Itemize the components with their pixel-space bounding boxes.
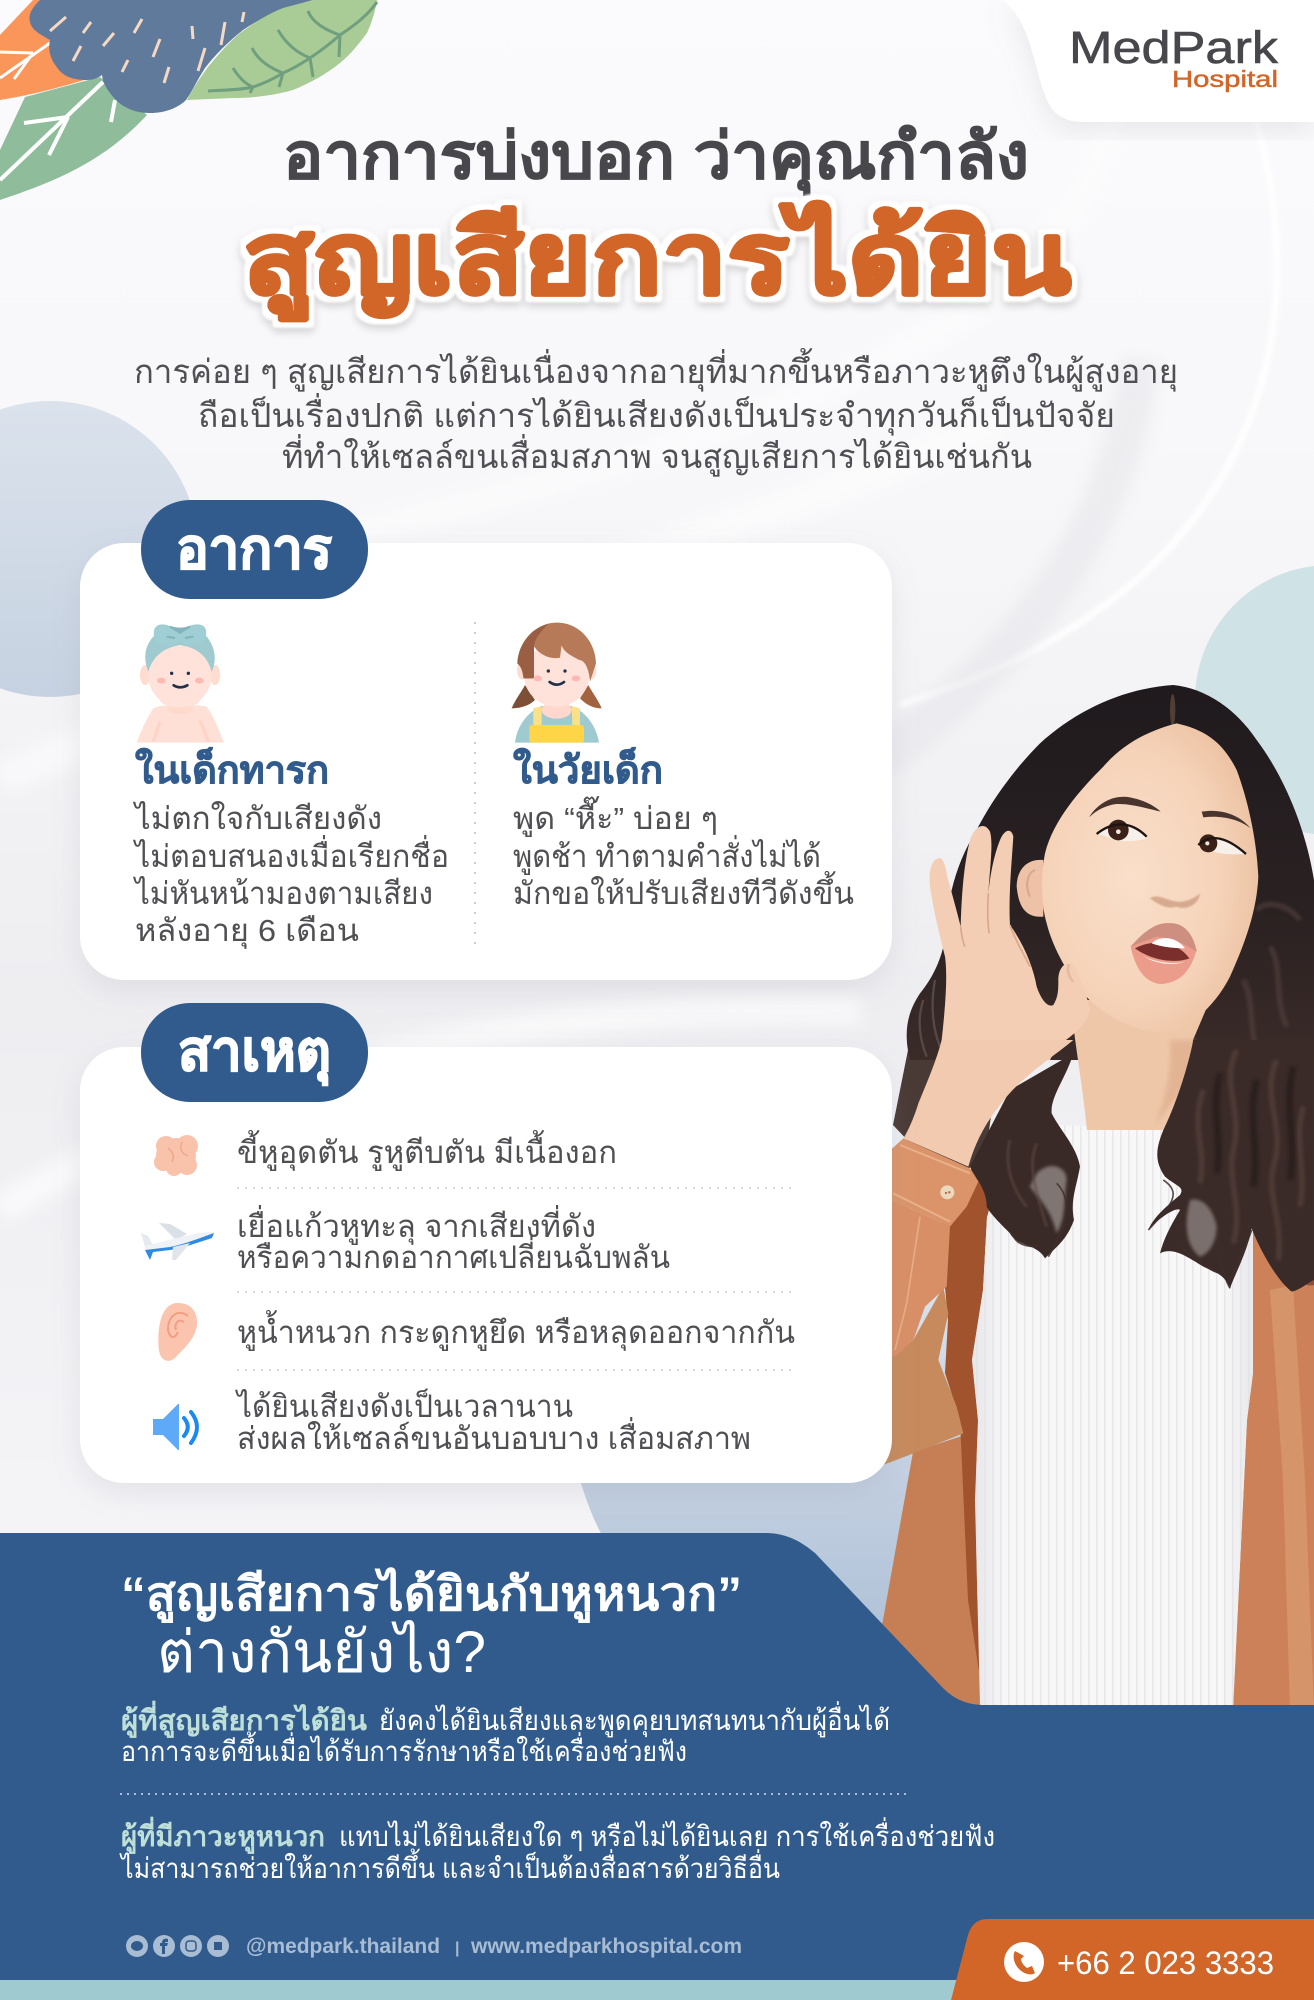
jacket cuff bbox=[870, 1138, 978, 1227]
causes heading pill: สาเหตุ bbox=[178, 1019, 331, 1086]
cause 2 bbox=[237, 1205, 670, 1275]
panel heading: “สูญเสียการได้ยินกับหูหนวก” bbox=[121, 1566, 742, 1624]
footer handle and website: | bbox=[455, 1940, 459, 1957]
icon: earwax bbox=[154, 1135, 198, 1176]
cause 1: ขี้หูอุดตัน รูหูตีบตัน มีเนื้องอก bbox=[237, 1130, 617, 1172]
hair wisps bbox=[1013, 1180, 1252, 1288]
logo sub-label: Hospital bbox=[1172, 66, 1278, 92]
decorative circle left bbox=[0, 401, 198, 697]
jacket lower front bbox=[860, 1435, 985, 1710]
hair behind wrist bbox=[893, 1050, 1000, 1180]
nose bbox=[1150, 893, 1200, 908]
mouth bbox=[1131, 923, 1197, 984]
cause 2: เยื่อแก้วหูทะลุ จากเสียงที่ดัง bbox=[237, 1205, 596, 1246]
baby symptoms list: หลังอายุ 6 เดือน bbox=[135, 913, 359, 950]
text: hearing loss: อาการจะดีขึ้นเมื่อได้รับการรักษาหรือใช้เครื่องช่วยฟัง bbox=[121, 1731, 687, 1767]
hair upper bbox=[907, 685, 1314, 1060]
child symptoms list: พูด “หื๊ะ” บ่อย ๆ bbox=[513, 796, 718, 837]
cause 2: หรือความกดอากาศเปลี่ยนฉับพลัน bbox=[237, 1236, 670, 1275]
title line 1: อาการบ่งบอก ว่าคุณกำลัง bbox=[283, 120, 1029, 196]
causes heading pill bbox=[141, 1003, 368, 1102]
jacket dark inner bbox=[940, 1165, 1000, 1710]
baby symptoms list: ไม่ตกใจกับเสียงดัง bbox=[132, 801, 382, 836]
text: deafness bbox=[119, 1816, 995, 1884]
panel: causes bbox=[80, 1003, 892, 1483]
icon: airplane bbox=[141, 1223, 214, 1260]
footer handle and website bbox=[246, 1935, 742, 1958]
text: deafness: ผู้ที่มีภาวะหูหนวก bbox=[121, 1816, 325, 1854]
intro paragraph: การค่อย ๆ สูญเสียการได้ยินเนื่องจากอายุที่มากขึ้นหรือภาวะหูตึงในผู้สูงอายุ bbox=[134, 348, 1178, 392]
ear bbox=[1017, 860, 1043, 917]
icon: speaker bbox=[153, 1404, 197, 1450]
decorative circle bottom bbox=[569, 1105, 1159, 1695]
cause 3: หูน้ำหนวก กระดูกหูยึด หรือหลุดออกจากกัน bbox=[237, 1310, 795, 1352]
cause 4: ได้ยินเสียงดังเป็นเวลานาน bbox=[234, 1388, 573, 1424]
title line 2: สูญเสียการได้ยิน bbox=[243, 202, 1071, 321]
child symptoms list: พูดช้า ทำตามคำสั่งไม่ได้ bbox=[513, 835, 821, 875]
jacket right side bbox=[1233, 1230, 1314, 1710]
child symptoms list bbox=[513, 796, 854, 911]
baby symptoms list: ไม่หันหน้ามองตามเสียง bbox=[132, 876, 433, 911]
symptoms heading pill: อาการ bbox=[176, 517, 332, 580]
logo panel bbox=[1003, 0, 1314, 122]
footer social icons bbox=[126, 1935, 229, 1957]
phone number: +66 2 023 3333 bbox=[1057, 1945, 1274, 1981]
wrist bbox=[903, 1040, 1073, 1167]
intro paragraph: ที่ทำให้เซลล์ขนเสื่อมสภาพ จนสูญเสียการได้ยินเช่นกัน bbox=[282, 434, 1032, 477]
icon: girl bbox=[512, 623, 602, 743]
footer handle and website: www.medparkhospital.com bbox=[470, 1935, 742, 1958]
icon: phone bbox=[1004, 1942, 1044, 1982]
photo: woman cupping her ear bbox=[860, 685, 1314, 1710]
white ribbed top bbox=[972, 1125, 1253, 1705]
symptoms heading pill bbox=[141, 500, 368, 599]
hand bbox=[930, 826, 1090, 1060]
baby heading: ในเด็กทารก bbox=[135, 747, 329, 792]
panel: bottom blue section shape bbox=[0, 1533, 1314, 1980]
eyebrows bbox=[1089, 797, 1161, 817]
eyes bbox=[1097, 825, 1147, 841]
sleeve bbox=[870, 1200, 963, 1470]
neck bbox=[1070, 1000, 1210, 1130]
leaves top-left bbox=[0, 0, 377, 200]
orange phone tab bbox=[951, 1919, 1314, 2000]
icon: ear bbox=[158, 1303, 197, 1361]
intro paragraph: ถือเป็นเรื่องปกติ แต่การได้ยินเสียงดังเป็นประจำทุกวันก็เป็นปัจจัย bbox=[198, 393, 1115, 436]
panel: hearing loss vs deafness bbox=[119, 1566, 995, 1884]
text: hearing loss bbox=[121, 1700, 890, 1767]
child symptoms list: มักขอให้ปรับเสียงทีวีดังขึ้น bbox=[513, 871, 854, 911]
intro paragraph bbox=[134, 348, 1178, 477]
child heading: ในวัยเด็ก bbox=[513, 747, 663, 792]
logo wordmark: MedPark bbox=[1069, 22, 1279, 73]
icon: baby bbox=[137, 624, 224, 743]
baby symptoms list: ไม่ตอบสนองเมื่อเรียกชื่อ bbox=[132, 835, 449, 874]
panel subheading: ต่างกันยังไง? bbox=[157, 1619, 486, 1685]
text: hearing loss: ผู้ที่สูญเสียการได้ยิน bbox=[121, 1700, 367, 1738]
cause 4 bbox=[234, 1388, 751, 1456]
cause 4: ส่งผลให้เซลล์ขนอันบอบบาง เสื่อมสภาพ bbox=[237, 1417, 751, 1456]
text: deafness: แทบไม่ได้ยินเสียงใด ๆ หรือไม่ได้ยินเลย การใช้เครื่องช่วยฟัง bbox=[339, 1817, 995, 1852]
text: deafness: ไม่สามารถช่วยให้อาการดีขึ้น และจำเป็นต้องสื่อสารด้วยวิธีอื่น bbox=[119, 1848, 780, 1884]
baby symptoms list bbox=[132, 801, 449, 950]
footer handle and website: @medpark.thailand bbox=[246, 1935, 440, 1958]
hair lower masses bbox=[970, 1040, 1314, 1292]
bottom teal strip bbox=[0, 1980, 1314, 2000]
text: hearing loss: ยังคงได้ยินเสียงและพูดคุยบทสนทนากับผู้อื่นได้ bbox=[379, 1701, 890, 1738]
decorative circle right bbox=[1195, 565, 1314, 835]
face bbox=[1042, 723, 1258, 1033]
panel: symptoms bbox=[80, 500, 892, 980]
